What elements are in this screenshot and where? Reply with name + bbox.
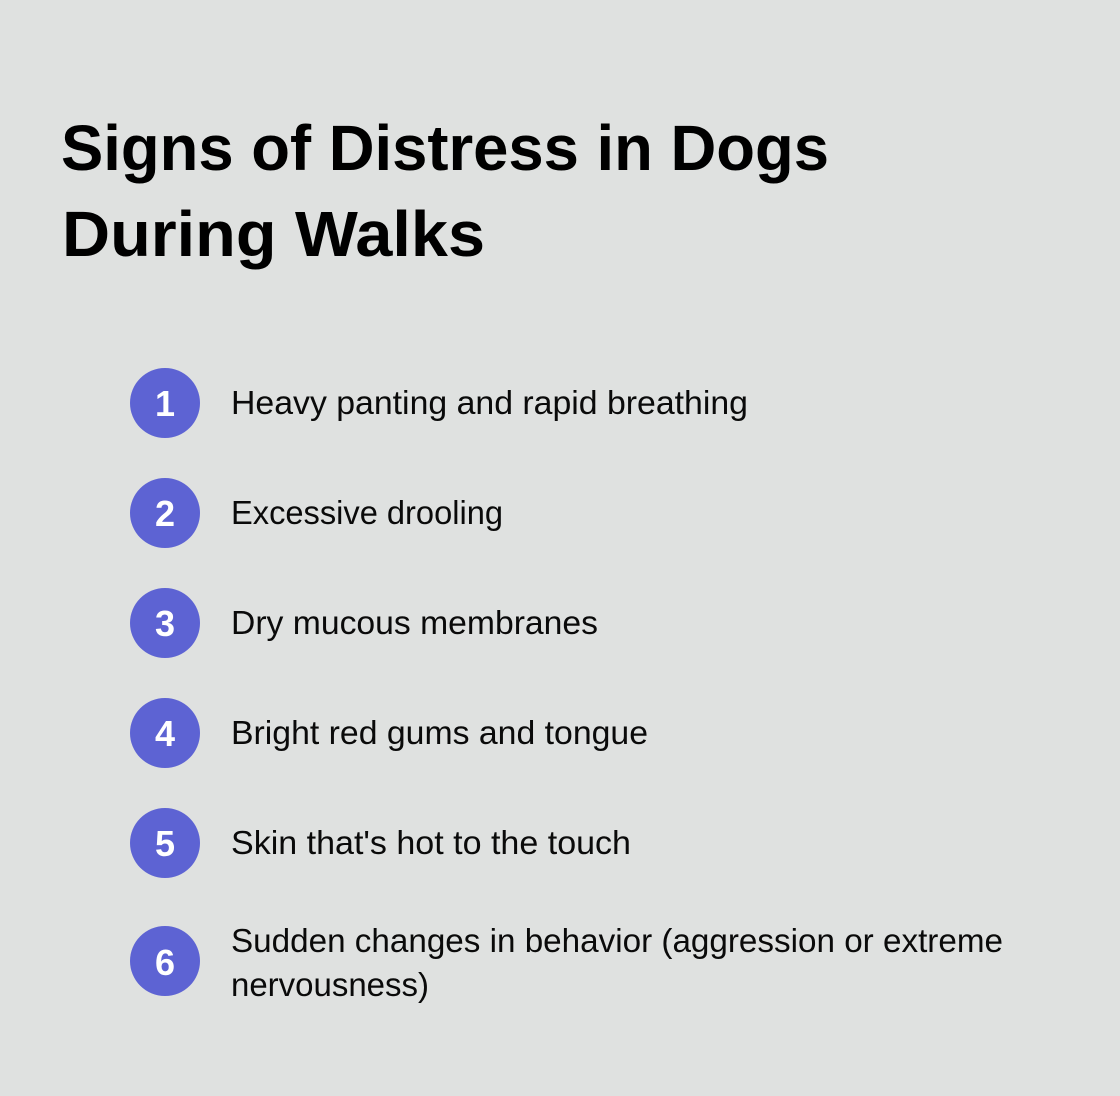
- list item 2: [130, 478, 503, 548]
- list item 2: Excessive drooling: [231, 494, 503, 531]
- title: Signs of Distress in Dogs: [61, 112, 829, 184]
- list item 3: 3: [155, 603, 175, 644]
- list item 5: [130, 808, 631, 878]
- title: During Walks: [62, 198, 485, 270]
- list item 3: Dry mucous membranes: [231, 604, 598, 641]
- list item 1: [130, 368, 748, 438]
- list item 4: [130, 698, 648, 768]
- title: [61, 112, 829, 270]
- list item 5: 5: [155, 823, 175, 864]
- list item 5: Skin that's hot to the touch: [231, 824, 631, 861]
- list item 3: [130, 588, 598, 658]
- list item 6: nervousness): [231, 966, 429, 1003]
- list item 2: 2: [155, 493, 175, 534]
- list item 6: Sudden changes in behavior (aggression or extreme: [231, 922, 1003, 959]
- list item 4: Bright red gums and tongue: [231, 714, 648, 751]
- list item 1: Heavy panting and rapid breathing: [231, 384, 748, 421]
- list item 4: 4: [155, 713, 175, 754]
- list item 6: 6: [155, 942, 175, 983]
- list item 6: [130, 922, 1003, 1003]
- list item 1: 1: [155, 383, 175, 424]
